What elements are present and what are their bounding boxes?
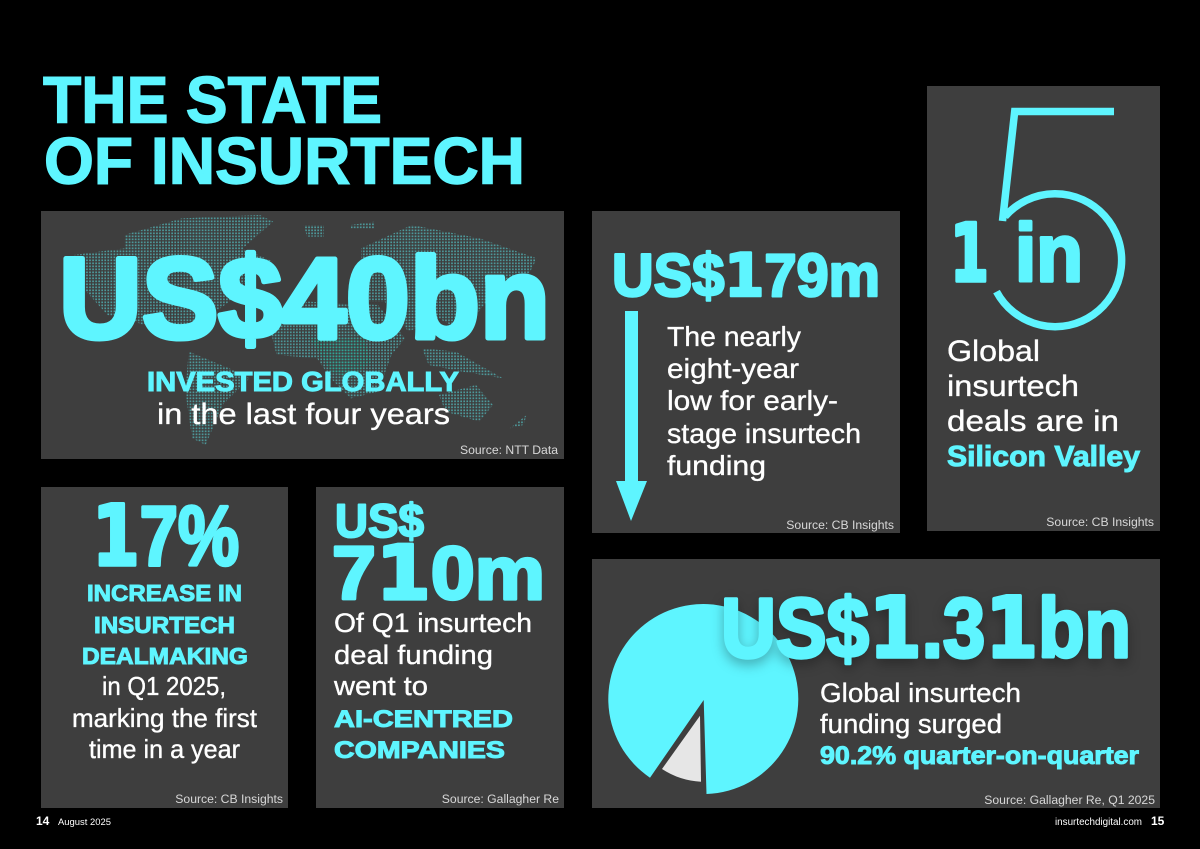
description: Global — [947, 335, 1040, 368]
description: stage insurtech — [667, 418, 861, 449]
description — [333, 608, 532, 701]
footer right: insurtechdigital.com — [1055, 817, 1142, 828]
headline figure — [950, 207, 1083, 300]
description: deals are in — [947, 405, 1119, 438]
subheading: INCREASE IN — [87, 580, 242, 606]
source: Source: CB Insights — [175, 792, 283, 806]
source: Source: NTT Data — [460, 443, 558, 457]
description: The nearly — [667, 321, 801, 352]
headline figure: US$ — [335, 494, 424, 547]
footer left — [36, 814, 111, 828]
description: deal funding — [334, 640, 493, 670]
description: time in a year — [89, 734, 240, 764]
headline figure: in — [1015, 208, 1083, 299]
description: eight-year — [667, 353, 799, 384]
description: Of Q1 insurtech — [334, 608, 532, 638]
description: low for early- — [667, 385, 838, 416]
subheading: DEALMAKING — [82, 643, 248, 669]
description — [820, 678, 1139, 770]
title: OF INSURTECH — [44, 124, 525, 198]
headline figure: 1 — [950, 207, 989, 300]
footer left: August 2025 — [58, 817, 111, 828]
panel: US$179m low — [592, 211, 900, 533]
description: funding surged — [820, 709, 1002, 739]
subheading: AI-CENTRED — [334, 706, 513, 733]
description: in the last four years — [157, 398, 450, 431]
panel: 17% dealmaking — [41, 487, 288, 808]
description: Global insurtech — [820, 678, 1021, 708]
source: Source: Gallagher Re — [442, 792, 559, 806]
panel: US$40bn invested globally — [41, 211, 564, 459]
subheading: INVESTED GLOBALLY — [147, 366, 459, 397]
panel: 1 in 5 — [927, 86, 1160, 531]
title — [43, 62, 525, 198]
description — [667, 321, 861, 481]
headline figure: 17% — [92, 487, 239, 585]
description: Silicon Valley — [947, 441, 1140, 473]
description: 90.2% quarter-on-quarter — [820, 742, 1139, 770]
headline figure: US$179m — [612, 241, 880, 311]
description: in Q1 2025, — [102, 671, 226, 701]
description: funding — [667, 450, 766, 481]
headline figure: US$40bn — [59, 235, 550, 363]
pie chart — [608, 604, 798, 794]
footer right: 15 — [1151, 814, 1165, 828]
subheading: COMPANIES — [334, 737, 505, 764]
source: Source: Gallagher Re, Q1 2025 — [984, 793, 1155, 807]
description — [947, 335, 1140, 473]
source: Source: CB Insights — [1046, 515, 1154, 529]
headline figure: 710m — [332, 529, 545, 617]
panel: US$1.31bn funding — [592, 559, 1160, 808]
description — [72, 671, 258, 764]
description: insurtech — [947, 370, 1079, 403]
footer right — [1055, 814, 1165, 828]
headline figure — [332, 494, 545, 617]
title: THE STATE — [43, 62, 382, 136]
description: marking the first — [72, 703, 258, 733]
icon: down arrow — [616, 311, 647, 521]
footer left: 14 — [36, 814, 50, 828]
icon: outlined numeral five — [996, 112, 1122, 327]
description: went to — [333, 671, 428, 701]
source: Source: CB Insights — [786, 518, 894, 532]
subheading — [82, 580, 248, 669]
dotted world map — [74, 215, 537, 445]
subheading: INSURTECH — [94, 612, 235, 638]
panel: US$710m AI-centred — [316, 487, 564, 808]
subheading — [334, 706, 513, 764]
headline figure: US$1.31bn — [721, 579, 1131, 677]
